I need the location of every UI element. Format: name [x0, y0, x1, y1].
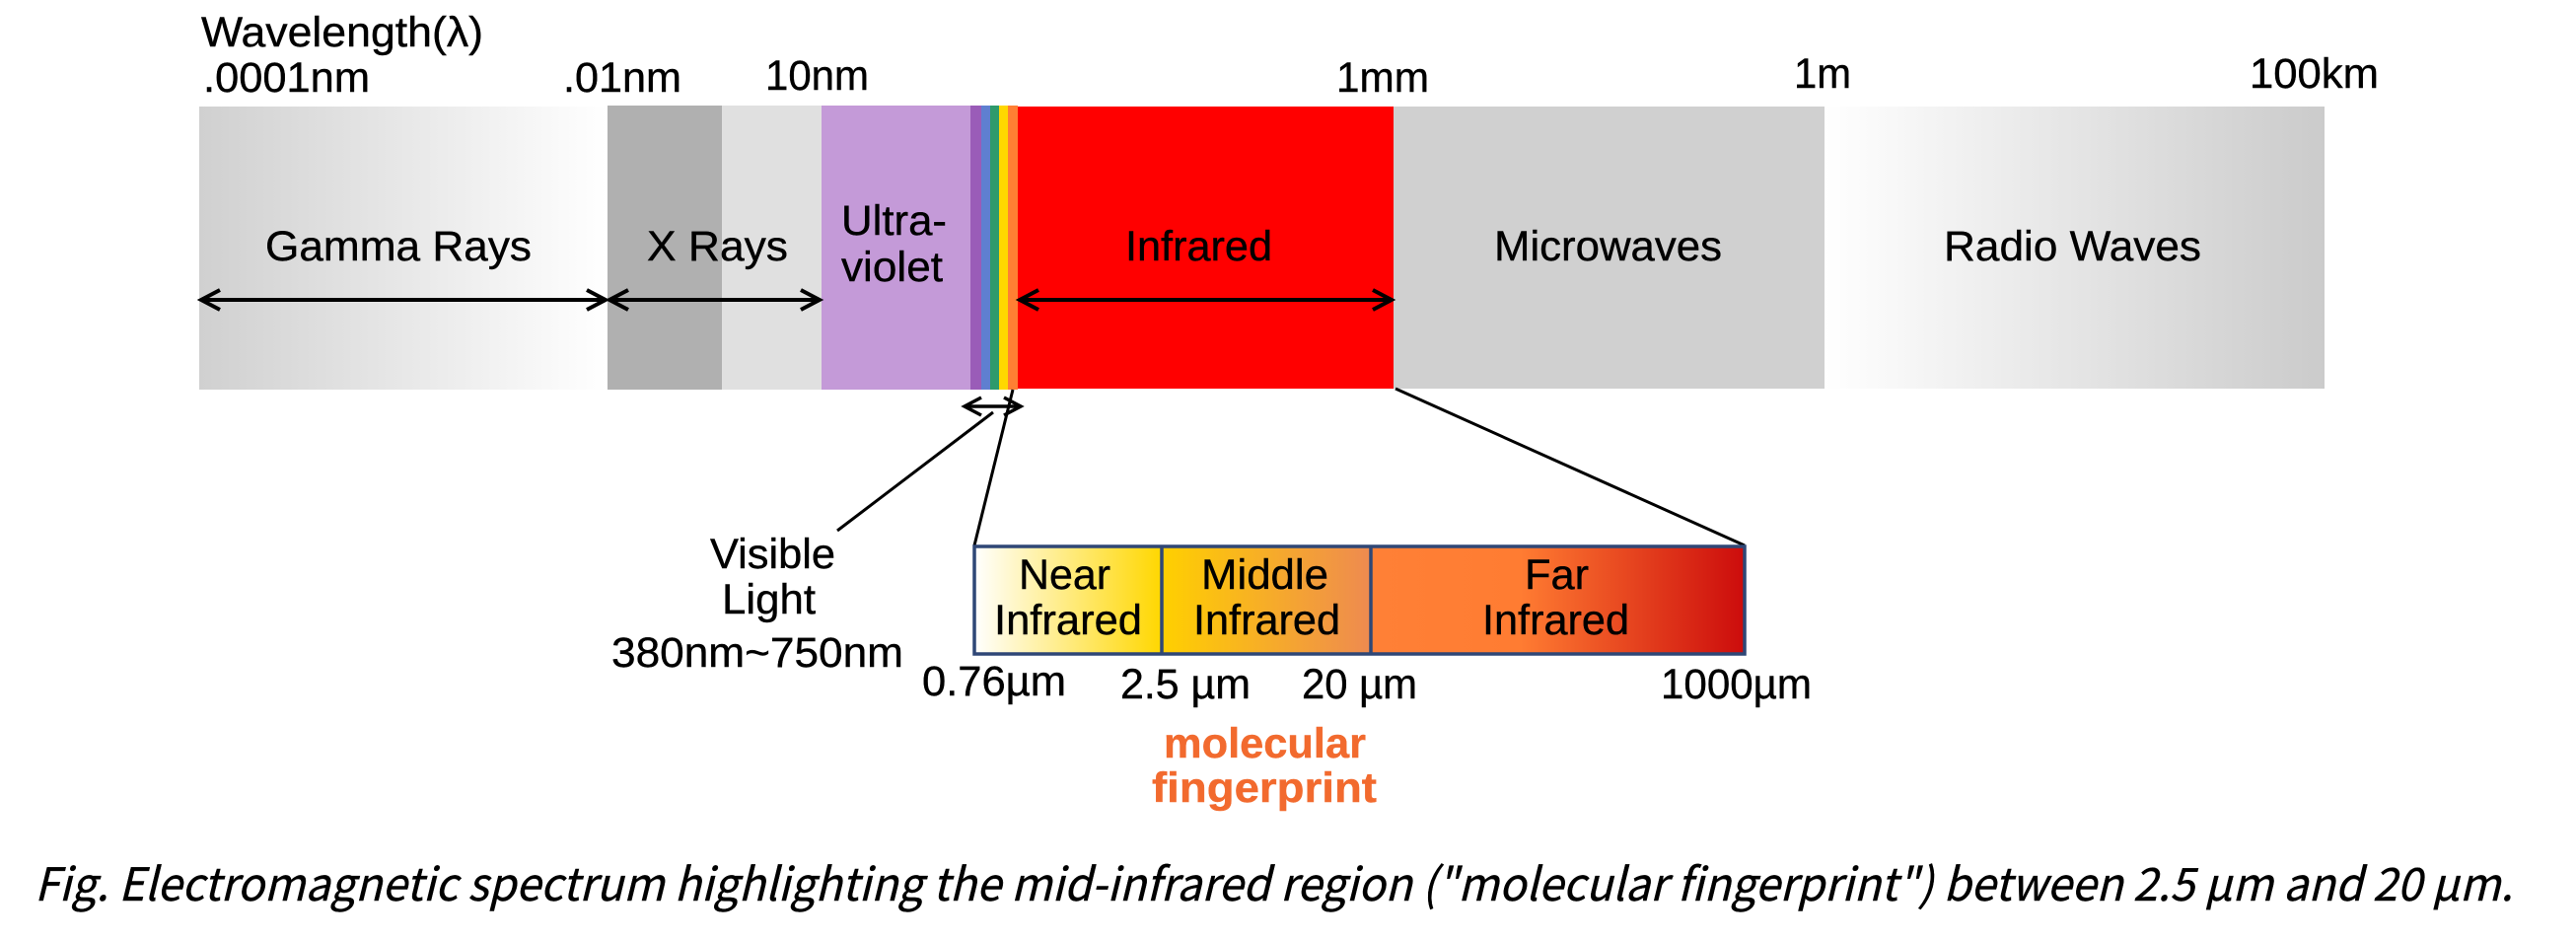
band labels: Infrared	[1125, 223, 1272, 270]
wavelength scale labels: 100km	[2250, 50, 2379, 98]
visible light colour stripes	[970, 106, 1018, 390]
infrared breakdown panel	[974, 546, 1745, 654]
visible light label	[611, 531, 903, 677]
segment labels: Infrared	[1193, 597, 1340, 644]
middle infrared segment	[1162, 546, 1371, 654]
segment labels: Far	[1525, 551, 1589, 599]
arrow: gamma rays range	[201, 290, 606, 310]
visible light label: Visible	[710, 531, 835, 578]
figure caption: Fig. Electromagnetic spectrum highlighting the mid-infrared region ("molecular fingerprint") between 2.5 µm and 20 µm.	[35, 849, 2513, 914]
infrared boundary labels	[922, 658, 1812, 708]
infrared boundary labels: 0.76µm	[922, 658, 1066, 705]
far infrared segment	[1371, 546, 1745, 654]
band labels: X Rays	[647, 223, 788, 270]
infrared band	[1018, 107, 1394, 389]
infrared boundary labels: 2.5 µm	[1120, 661, 1251, 708]
wavelength scale labels: 1mm	[1336, 54, 1429, 102]
band labels: Ultra-	[841, 197, 947, 245]
radio waves band	[1825, 107, 2325, 389]
arrow: visible light range	[965, 398, 1021, 415]
near infrared segment	[974, 546, 1162, 654]
arrow: infrared range	[1020, 290, 1392, 310]
molecular fingerprint label: fingerprint	[1152, 764, 1377, 812]
segment labels: Middle	[1201, 551, 1328, 599]
band labels: Gamma Rays	[265, 223, 532, 270]
wavelength axis title: Wavelength(λ)	[201, 9, 483, 56]
segment labels: Infrared	[1482, 597, 1629, 644]
wavelength scale labels: .01nm	[563, 54, 681, 102]
infrared boundary labels: 20 µm	[1302, 661, 1417, 708]
visible light label: 380nm~750nm	[611, 629, 903, 677]
spectrum bar	[199, 106, 2325, 390]
x rays band	[608, 106, 822, 390]
segment labels	[994, 551, 1629, 644]
infrared boundary labels: 1000µm	[1661, 661, 1812, 708]
arrow: x rays range	[609, 290, 820, 310]
gamma rays band	[199, 107, 608, 390]
wavelength scale labels: 1m	[1794, 50, 1851, 98]
wavelength scale labels: 10nm	[765, 52, 869, 100]
band labels	[265, 197, 2201, 291]
leader line: visible light	[837, 412, 993, 531]
wavelength scale labels: .0001nm	[203, 54, 370, 102]
band labels: violet	[841, 244, 943, 291]
segment labels: Infrared	[994, 597, 1142, 644]
visible light label: Light	[722, 576, 816, 623]
ultraviolet band	[822, 106, 970, 390]
microwaves band	[1394, 107, 1825, 389]
molecular fingerprint label	[1152, 720, 1377, 812]
molecular fingerprint label: molecular	[1164, 720, 1366, 767]
zoom lines: infrared expansion	[974, 389, 1745, 545]
segment labels: Near	[1019, 551, 1110, 599]
panel border and dividers	[974, 546, 1745, 654]
band labels: Radio Waves	[1944, 223, 2201, 270]
band labels: Microwaves	[1494, 223, 1722, 270]
wavelength scale labels	[203, 50, 2379, 102]
